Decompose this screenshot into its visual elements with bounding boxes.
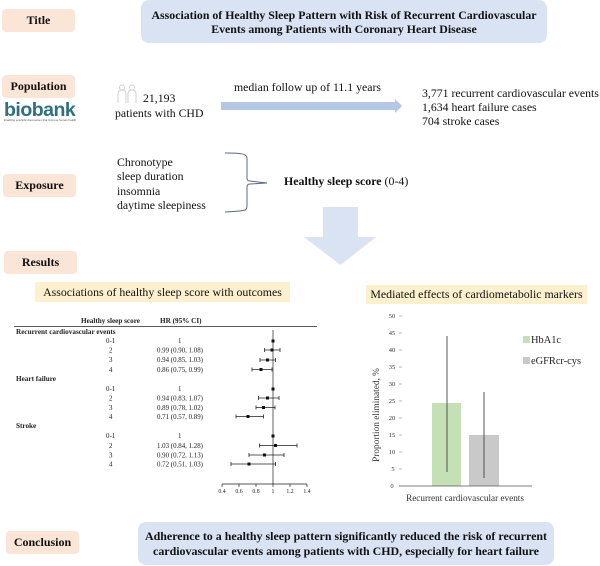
group: recurrent cardiovascular events: 2 (109, 348, 113, 354)
biobank logo: biobank (4, 99, 75, 121)
group: recurrent cardiovascular events: 0-1 (106, 338, 116, 345)
group: stroke: 3 (109, 452, 113, 460)
group: stroke (16, 422, 203, 468)
population label: Population (10, 79, 66, 93)
y axis ticks: 50 (389, 313, 395, 320)
group: stroke: 2 (109, 443, 113, 450)
associations heading: Associations of healthy sleep score with outcomes (43, 285, 282, 299)
exposure label (3, 174, 76, 197)
title box: Events among Patients with Coronary Heart Disease (211, 22, 477, 36)
associations heading (35, 282, 290, 302)
outcome counts: 1,634 heart failure cases (422, 100, 537, 114)
x axis label: Recurrent cardiovascular events (406, 493, 524, 503)
patient count: 21,193 (143, 91, 175, 105)
exposure components: insomnia (117, 184, 160, 198)
legend: eGFRcr-cys (531, 356, 581, 367)
bar: eGFRcr-cys (469, 435, 499, 486)
forest axis labels: 0.4 (218, 489, 226, 495)
group: heart failure: 0.71 (0.57, 0.89) (157, 414, 203, 421)
exposure components: daytime sleepiness (117, 198, 206, 212)
y axis ticks: 30 (389, 381, 395, 388)
group: recurrent cardiovascular events: 0.86 (0.75, 0.99) (157, 367, 203, 374)
point estimates (246, 340, 277, 466)
y axis ticks: 25 (389, 398, 395, 405)
group: recurrent cardiovascular events: Recurrent cardiovascular events (16, 328, 116, 336)
title box (141, 0, 547, 43)
forest plot header: HR (95% CI) (160, 317, 202, 325)
group: heart failure: 3 (109, 405, 113, 412)
outcome counts: 3,771 recurrent cardiovascular events (422, 86, 599, 100)
y axis ticks: 0 (390, 483, 394, 490)
bar: HbA1c (432, 403, 461, 486)
conclusion box (138, 522, 554, 565)
error bars (447, 336, 484, 478)
group: heart failure (16, 375, 203, 421)
y axis ticks: 15 (389, 432, 395, 439)
group: recurrent cardiovascular events: 3 (109, 357, 113, 364)
conclusion label: Conclusion (14, 535, 71, 549)
group: heart failure: 1 (178, 386, 182, 393)
group: stroke: 0-1 (106, 433, 116, 440)
y axis ticks: 35 (389, 364, 395, 371)
exposure label: Exposure (15, 178, 64, 192)
y axis ticks: 10 (389, 449, 395, 456)
results label: Results (22, 255, 59, 269)
y axis title: Proportion eliminated, % (372, 368, 382, 462)
group: heart failure: Heart failure (16, 375, 56, 383)
group: heart failure: 0.94 (0.83, 1.07) (157, 396, 203, 402)
group: recurrent cardiovascular events: 0.94 (0.85, 1.03) (157, 357, 203, 364)
follow-up label: median follow up of 11.1 years (234, 80, 381, 94)
forest axis labels: 1.4 (303, 489, 311, 495)
group: recurrent cardiovascular events: 0.99 (0.90, 1.08) (157, 348, 203, 354)
y axis ticks (389, 313, 395, 490)
group: heart failure: 0-1 (106, 386, 116, 393)
healthy sleep score: Healthy sleep score (0-4) (284, 174, 408, 188)
group: recurrent cardiovascular events: 1 (178, 338, 182, 345)
group: stroke: 4 (109, 462, 113, 468)
y axis ticks: 45 (389, 330, 395, 337)
x axis (399, 485, 532, 487)
group: recurrent cardiovascular events: 4 (109, 367, 113, 374)
outcome counts: 704 stroke cases (422, 114, 499, 128)
group: stroke: 0.72 (0.51, 1.03) (157, 462, 203, 468)
group: heart failure: 2 (109, 396, 113, 402)
group: stroke: Stroke (16, 422, 36, 430)
forest axis labels: 0.6 (235, 489, 243, 495)
patient description: patients with CHD (115, 106, 203, 120)
title box: Association of Healthy Sleep Pattern with Risk of Recurrent Cardiovascular (152, 8, 536, 22)
group: heart failure: 0.89 (0.78, 1.02) (157, 405, 203, 412)
forest axis (222, 330, 307, 487)
forest axis labels: 1.2 (286, 489, 294, 495)
group: heart failure: 4 (109, 414, 113, 421)
y axis ticks: 40 (389, 347, 395, 354)
forest plot header: Healthy sleep score (81, 317, 140, 325)
results label (4, 251, 77, 274)
forest plot header (14, 317, 317, 326)
conclusion box: Adherence to a healthy sleep pattern significantly reduced the risk of recurrent (145, 529, 547, 543)
y axis ticks: 20 (389, 415, 395, 422)
mediation heading: Mediated effects of cardiometabolic markers (370, 287, 583, 301)
group: stroke: 1 (178, 433, 182, 440)
confidence intervals (231, 348, 297, 466)
population label (2, 75, 75, 98)
y axis ticks: 5 (391, 466, 395, 473)
exposure components: sleep duration (117, 169, 184, 183)
icon: patients (118, 84, 136, 103)
legend (523, 335, 581, 367)
exposure components (117, 155, 206, 212)
conclusion label (6, 531, 79, 554)
group: recurrent cardiovascular events (16, 328, 203, 374)
forest axis labels (218, 489, 311, 495)
legend: HbA1c (531, 335, 561, 346)
forest axis labels: 0.8 (252, 489, 260, 495)
group: stroke: 0.90 (0.72, 1.13) (157, 452, 203, 460)
title label (2, 9, 75, 32)
conclusion box: cardiovascular events among patients with CHD, especially for heart failure (153, 544, 539, 558)
biobank logo: Enabling scientific discoveries that improve human health (4, 118, 76, 122)
forest axis labels: 1 (272, 489, 275, 495)
outcome counts (422, 86, 599, 128)
title label: Title (27, 13, 50, 27)
group: stroke: 1.03 (0.84, 1.28) (157, 443, 203, 450)
exposure components: Chronotype (117, 155, 173, 169)
